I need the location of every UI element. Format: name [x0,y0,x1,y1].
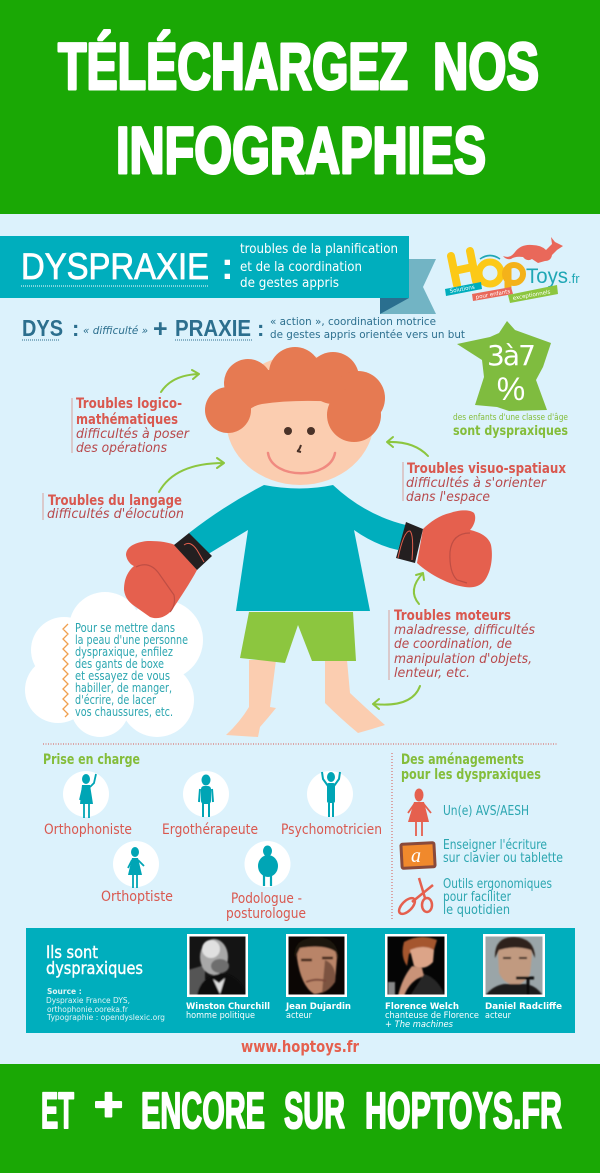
etymology line: dys + praxie [22,315,466,343]
caption: Welch [385,1002,479,1030]
arrow: to foot [373,686,420,709]
face [226,355,374,485]
ribbon title: dyspraxie definition: DYSPRAXIE [21,246,209,287]
icon: AVS person [408,788,431,836]
cloud callout: boxing gloves: Pour se mettre dans [75,621,175,635]
label: troubles logico-mathematiques: difficultés à poser [76,427,191,442]
France map statistic: 3à7 [487,339,536,372]
logo: HopToys: exceptionnels [512,289,551,302]
text: clavier: Enseigner l'écriture [443,838,547,853]
caption: Welch: chanteuse de Florence [385,1011,479,1021]
bottom banner [0,1064,600,1173]
orthophoniste: Orthophoniste [44,822,132,838]
text: outils: Outils ergonomiques [443,877,552,892]
heading: ils sont dyspraxiques: Ils sont [46,943,98,963]
photo: Jean Dujardin [286,934,347,997]
top banner: download title: NOS [433,29,539,103]
ribbon title: dyspraxie definition: de gestes appris [240,276,339,291]
France map statistic: des enfants d'une classe d'âge [453,413,568,423]
legs and feet [226,660,385,737]
ribbon title: dyspraxie definition: et de la coordination [240,260,362,275]
heading: ils sont dyspraxiques [46,943,143,979]
caption: Churchill [186,1002,270,1021]
label: troubles du langage: difficultés d'élocution [47,507,184,522]
cloud callout: boxing gloves: la peau d'une personne [75,633,188,647]
arrow: to glove [414,573,424,604]
caption: Radcliffe: acteur [485,1011,511,1021]
label: troubles moteurs: de coordination, de [394,637,512,652]
arrow: to head from visuo-spatial [387,437,428,456]
top banner: download title: TÉLÉCHARGEZ [58,29,408,103]
right glove [396,510,492,587]
arrow: to head from logico [161,370,199,392]
psychomotricien: Psychomotricien [281,822,382,838]
bottom banner: SUR [284,1082,345,1139]
website link: www.hoptoys.fr [241,1037,359,1056]
heading: ils sont dyspraxiques: dyspraxiques [46,959,143,979]
logo: HopToys: .fr [568,271,580,286]
icon: kangaroo [503,237,563,263]
ribbon title: dyspraxie definition [0,236,436,314]
ribbon title: dyspraxie definition: troubles de la planification [240,242,398,257]
text: outils [443,877,552,918]
photo: Daniel Radcliffe [483,934,545,997]
photo: Welch [385,934,447,997]
heading: prise en charge: Prise en charge [43,752,140,768]
photo: Winston Churchill [187,934,248,997]
label: troubles logico-mathematiques: mathématiques [76,412,178,428]
logo: HopToys: Solutions [449,285,475,295]
caption: Dujardin: acteur [286,1011,312,1021]
podologue: posturologue [226,906,306,922]
orthophoniste [44,771,132,838]
etymology line: dys + praxie: PRAXIE [175,315,251,341]
eyes and nose [284,427,315,452]
text: outils: le quotidien [443,903,510,918]
label: troubles visuo-spatiaux [403,461,566,505]
panel: amenagements [396,752,563,918]
caption: Dujardin [285,1002,351,1021]
cloud callout: boxing gloves [25,592,203,737]
label: troubles moteurs: manipulation d'objets, [394,652,532,667]
etymology line: dys + praxie: « action », coordination motrice [270,315,436,328]
left glove [124,533,212,618]
etymology line: dys + praxie: + [153,315,168,343]
label: troubles logico-mathematiques [72,396,191,456]
bottom banner: + [94,1078,123,1130]
France map statistic [453,321,568,439]
heading: amenagements: Des aménagements [401,752,524,768]
ergotherapeute: Ergothérapeute [162,822,258,838]
France map statistic: sont dyspraxiques [453,424,568,439]
arrow: to head from langage [159,458,224,492]
label: troubles logico-mathematiques: des opérations [76,441,167,456]
cloud callout: boxing gloves: habiller, de manger, [75,681,172,695]
panel: ils sont dyspraxiques [26,928,575,1033]
logo: HopToys: pour enfants [475,289,511,301]
smile [268,453,335,473]
text: clavier: sur clavier ou tablette [443,851,563,866]
label: troubles moteurs [389,608,535,681]
text: clavier [443,838,563,866]
source: Dyspraxie France DYS, [46,996,130,1005]
label: troubles logico-mathematiques: Troubles logico- [76,396,182,412]
cloud callout: boxing gloves: vos chaussures, etc. [75,705,173,719]
icon: scissors [396,878,433,917]
label: troubles du langage [43,493,184,522]
caption: Welch: + The machines [385,1020,454,1030]
label: troubles visuo-spatiaux: difficultés à s'orienter [406,476,548,491]
caption: Welch: Florence Welch [385,1002,459,1012]
top banner: download title [0,0,600,214]
cloud callout: boxing gloves: des gants de boxe [75,657,164,671]
heading: amenagements: pour les dyspraxiques [401,767,541,783]
text: AVS: Un(e) AVS/AESH [443,804,529,819]
podologue [226,841,306,922]
shirt [189,485,406,611]
France map statistic: % [497,371,525,407]
ribbon title: dyspraxie definition: : [221,246,234,288]
cloud callout: boxing gloves: et essayez de vous [75,669,170,683]
caption: Radcliffe [485,1002,562,1021]
label: troubles visuo-spatiaux: Troubles visuo-spatiaux [407,461,566,477]
bottom banner: ET [41,1082,74,1139]
orthoptiste [101,841,173,905]
cloud callout: boxing gloves: dyspraxique, enfilez [75,645,173,659]
icon: tablet: a [411,845,421,867]
etymology line: dys + praxie: : [72,316,79,341]
psychomotricien [281,771,382,838]
label: troubles du langage: Troubles du langage [48,493,182,509]
caption: Dujardin: Jean Dujardin [285,1002,351,1012]
etymology line: dys + praxie: DYS [22,315,63,341]
label: troubles visuo-spatiaux: dans l'espace [406,490,490,505]
etymology line: dys + praxie: de gestes appris orientée vers un but [270,328,466,341]
text: outils: pour faciliter [443,890,512,905]
heading: amenagements [401,752,541,783]
source [46,987,165,1022]
podologue: Podologue - [231,891,302,907]
source: orthophonie.ooreka.fr [47,1005,129,1014]
caption: Churchill: homme politique [186,1011,255,1021]
label: troubles moteurs: lenteur, etc. [394,666,470,681]
logo: HopToys [445,237,580,303]
caption: Churchill: Winston Churchill [186,1002,270,1012]
hair [205,347,385,442]
ergotherapeute [162,771,258,838]
caption: Radcliffe: Daniel Radcliffe [485,1002,562,1012]
icon: tablet [399,841,437,870]
source: Typographie : opendyslexic.org [46,1013,165,1022]
label: troubles moteurs: Troubles moteurs [394,608,511,624]
etymology line: dys + praxie: : [257,316,264,341]
orthoptiste: Orthoptiste [101,889,173,905]
cloud callout: boxing gloves: d'écrire, de lacer [75,693,156,707]
panel: prise en charge [43,752,382,922]
etymology line: dys + praxie: « difficulté » [83,325,148,337]
logo: HopToys: Toys [526,265,568,288]
shorts [240,612,356,663]
bottom banner: ENCORE [141,1082,265,1139]
source: Source : [47,987,82,996]
child character with boxing gloves [124,347,492,737]
label: troubles moteurs: maladresse, difficultés [394,623,535,638]
